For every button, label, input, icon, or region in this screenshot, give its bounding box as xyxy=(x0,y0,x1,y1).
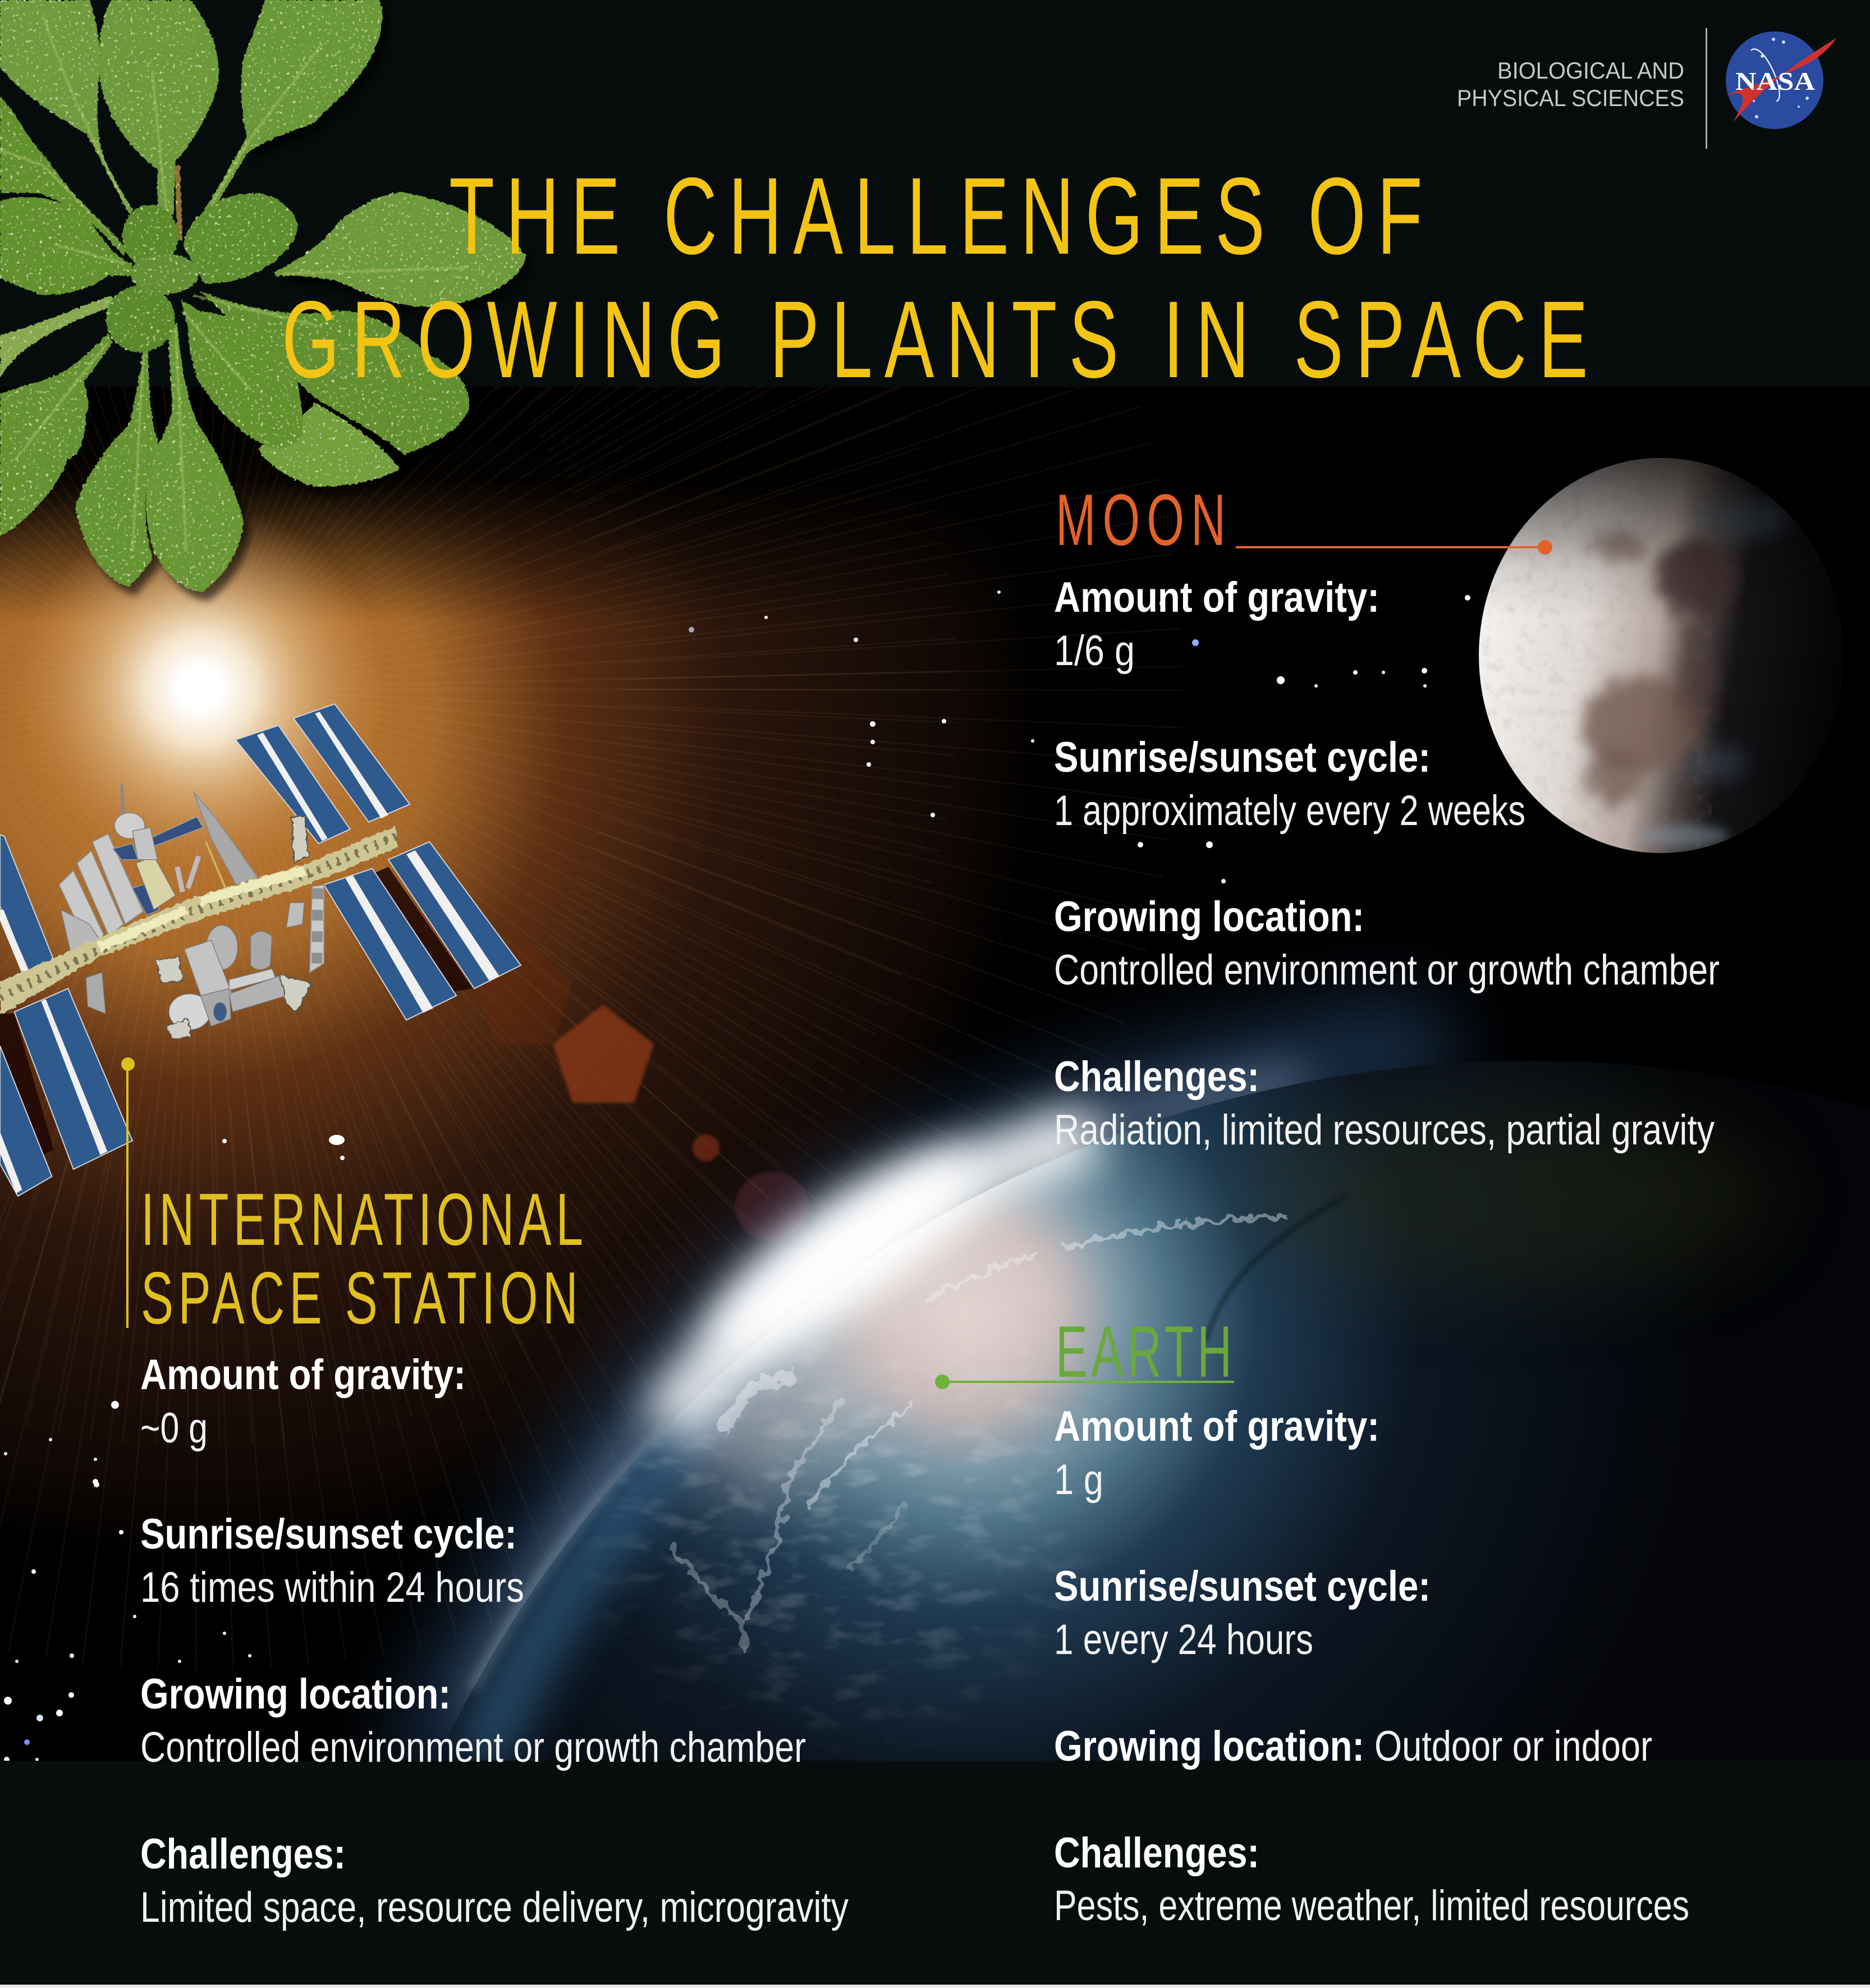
iss gravity xyxy=(140,1351,466,1452)
planet disc xyxy=(436,1061,1870,1762)
earth cycle xyxy=(1054,1563,1431,1664)
earth cycle: 1 every 24 hours xyxy=(1054,1616,1313,1664)
moon gravity xyxy=(1054,574,1379,675)
earth pointer xyxy=(935,1375,1234,1389)
moon heading: MOON xyxy=(1056,479,1226,561)
panel: earth xyxy=(935,1311,1689,1930)
earth challenges: Pests, extreme weather, limited resources xyxy=(1054,1882,1689,1930)
moon location: Controlled environment or growth chamber xyxy=(1054,946,1720,994)
NASA meatball xyxy=(1721,31,1836,129)
title xyxy=(282,155,1588,401)
iss location: Growing location: xyxy=(140,1670,451,1718)
organisation name xyxy=(1457,57,1684,111)
moon location xyxy=(1054,893,1720,994)
organisation name: BIOLOGICAL AND xyxy=(1497,57,1684,84)
iss heading: SPACE STATION xyxy=(141,1257,578,1339)
earth heading: EARTH xyxy=(1056,1311,1232,1392)
small arrays xyxy=(113,817,203,915)
sun xyxy=(15,503,386,874)
lens flares xyxy=(477,937,808,1242)
leaf veins xyxy=(0,16,465,552)
stars xyxy=(4,590,1470,1762)
limb highlight xyxy=(473,1120,1094,1689)
earth location xyxy=(1054,1723,1652,1770)
moon xyxy=(1470,455,1852,859)
bottom band xyxy=(0,1761,1870,1985)
NASA meatball: NASA xyxy=(1735,67,1815,95)
iss heading xyxy=(141,1178,583,1339)
logo: NASA Biological and Physical Sciences xyxy=(1457,28,1836,149)
bottom edge xyxy=(0,1985,1870,1988)
moon gravity: Amount of gravity: xyxy=(1054,574,1379,621)
earth gravity xyxy=(1054,1403,1379,1504)
earth cycle: Sunrise/sunset cycle: xyxy=(1054,1563,1431,1610)
radiators xyxy=(59,791,324,973)
plant xyxy=(0,0,533,600)
earth location: Outdoor or indoor xyxy=(1374,1723,1652,1770)
iss heading: INTERNATIONAL xyxy=(141,1178,583,1261)
station shadow xyxy=(0,867,473,1167)
modules xyxy=(61,785,304,1030)
truss xyxy=(0,826,398,1015)
plant shadow xyxy=(81,8,533,600)
moon challenges: Challenges: xyxy=(1054,1053,1259,1101)
earth challenges: Challenges: xyxy=(1054,1829,1259,1877)
moon gravity: 1/6 g xyxy=(1054,627,1135,675)
earth location: Growing location: xyxy=(1054,1723,1364,1770)
iss location: Controlled environment or growth chamber xyxy=(140,1724,806,1771)
iss cycle: 16 times within 24 hours xyxy=(140,1564,524,1611)
moon pointer xyxy=(1236,540,1552,555)
moon location: Growing location: xyxy=(1054,893,1364,941)
iss pointer xyxy=(121,1057,135,1328)
leaves xyxy=(0,0,526,592)
iss challenges xyxy=(140,1830,849,1931)
top band xyxy=(0,0,1870,387)
iss location xyxy=(140,1670,806,1771)
title: THE CHALLENGES OF xyxy=(449,155,1423,277)
iss challenges: Limited space, resource delivery, microgravity xyxy=(140,1884,849,1931)
iss cycle xyxy=(140,1510,524,1611)
earth xyxy=(436,1050,1870,1774)
moon cycle: Sunrise/sunset cycle: xyxy=(1054,734,1431,781)
panel: moon xyxy=(1054,479,1720,1154)
earth challenges xyxy=(1054,1829,1689,1930)
space station xyxy=(0,704,521,1196)
earth gravity: Amount of gravity: xyxy=(1054,1403,1379,1450)
earth gravity: 1 g xyxy=(1054,1456,1103,1504)
organisation name: PHYSICAL SCIENCES xyxy=(1457,85,1684,111)
moon cycle xyxy=(1054,734,1525,835)
moon challenges xyxy=(1054,1053,1715,1154)
iss cycle: Sunrise/sunset cycle: xyxy=(140,1510,517,1558)
atmosphere glow xyxy=(449,1050,1403,1740)
iss gravity: ~0 g xyxy=(140,1404,208,1452)
panel: international space station xyxy=(121,1057,849,1931)
title: GROWING PLANTS IN SPACE xyxy=(282,279,1588,401)
iss challenges: Challenges: xyxy=(140,1830,346,1878)
moon challenges: Radiation, limited resources, partial gravity xyxy=(1054,1106,1715,1154)
solar arrays xyxy=(0,704,521,1196)
module greebles xyxy=(155,817,311,1039)
iss gravity: Amount of gravity: xyxy=(140,1351,466,1399)
moon cycle: 1 approximately every 2 weeks xyxy=(1054,787,1525,835)
sun rays xyxy=(0,0,902,1390)
